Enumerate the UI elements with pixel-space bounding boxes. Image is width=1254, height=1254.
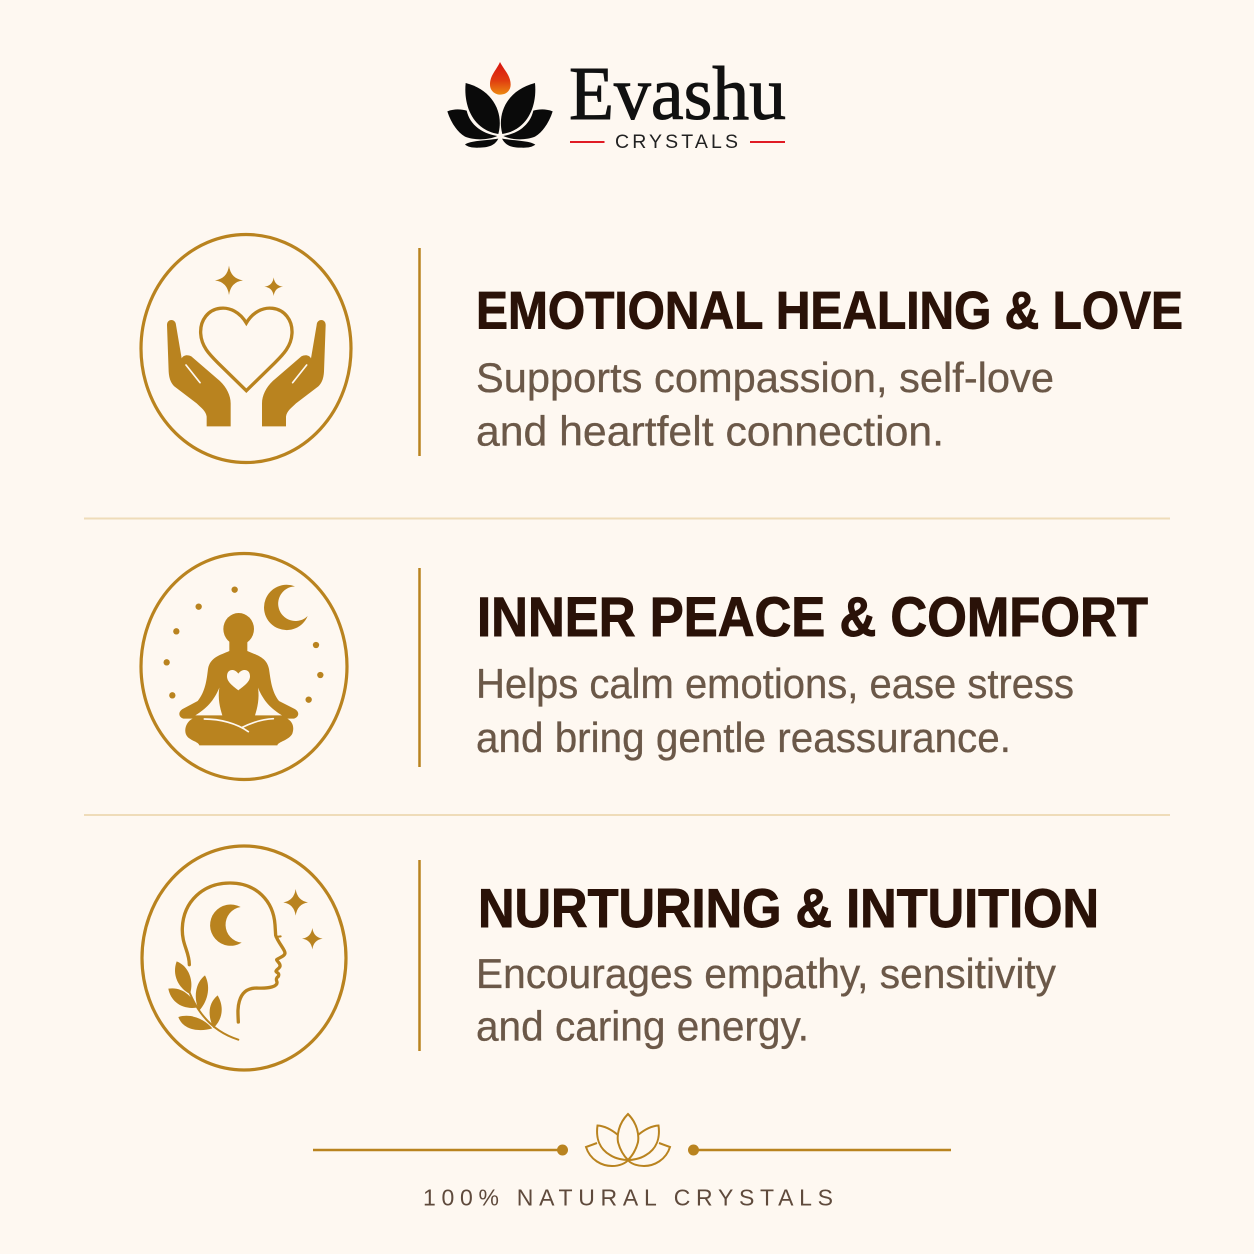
wordmark: Evashu xyxy=(569,52,786,136)
description: and caring energy. xyxy=(476,1002,809,1050)
icon: lotus with red drop xyxy=(447,62,553,148)
divider xyxy=(418,248,421,456)
brand logo xyxy=(447,52,786,153)
description: Encourages empathy, sensitivity xyxy=(476,950,1056,997)
panel: nurturing and intuition xyxy=(142,846,1099,1070)
footer tagline: 100% NATURAL CRYSTALS xyxy=(423,1184,833,1210)
description xyxy=(476,354,1054,454)
divider xyxy=(418,568,421,767)
description: Supports compassion, self-love xyxy=(476,354,1054,401)
sub-brand: crystals: CRYSTALS xyxy=(615,131,738,153)
description xyxy=(476,950,1056,1050)
heading: INNER PEACE & COMFORT xyxy=(477,586,1148,648)
icon: head profile with moon and leaves xyxy=(142,846,346,1070)
description xyxy=(476,660,1074,761)
icon: hands holding a heart xyxy=(141,234,351,462)
description: and bring gentle reassurance. xyxy=(476,714,1011,761)
heading: EMOTIONAL HEALING & LOVE xyxy=(476,282,1183,340)
heading: NURTURING & INTUITION xyxy=(478,878,1099,939)
description: and heartfelt connection. xyxy=(476,408,944,454)
icon: outline lotus xyxy=(586,1114,670,1166)
panel: emotional healing and love xyxy=(141,234,1183,462)
icon: meditating figure with moon xyxy=(141,554,347,780)
footer ornament with lotus xyxy=(313,1114,951,1166)
panel: inner peace and comfort xyxy=(141,554,1148,780)
description: Helps calm emotions, ease stress xyxy=(476,660,1074,707)
divider xyxy=(418,860,421,1051)
